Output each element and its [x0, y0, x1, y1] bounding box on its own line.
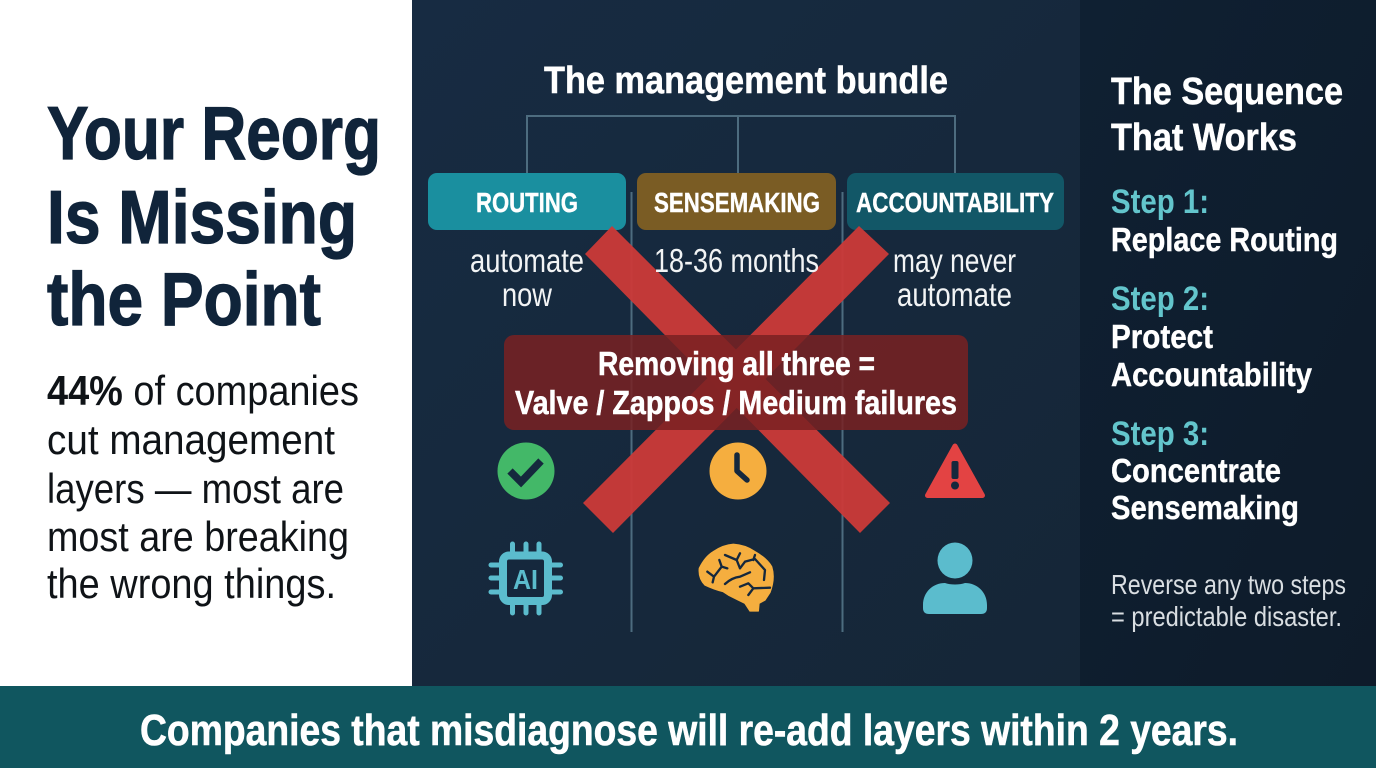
step 3 [1111, 415, 1299, 526]
step 3: Step 3: [1111, 415, 1209, 453]
heading: the management bundle: The management bundle [544, 60, 948, 102]
callout: removing all three [504, 335, 968, 430]
step 2: Protect [1111, 318, 1213, 355]
box: sensemaking: SENSEMAKING [654, 187, 820, 218]
bracket connector [527, 116, 955, 173]
statistic text: the wrong things. [47, 560, 336, 607]
text: automate now [470, 242, 584, 313]
panel: title and statistic [0, 0, 412, 686]
heading: sequence: That Works [1111, 117, 1297, 159]
heading: sequence [1111, 71, 1343, 159]
text: automate now: automate [470, 242, 584, 279]
icon: AI chip [491, 544, 560, 613]
box: sensemaking [637, 173, 836, 230]
statistic text: most are breaking [47, 513, 349, 560]
text: may never automate: automate [897, 276, 1012, 313]
statistic text: layers — most are [47, 465, 344, 512]
text: automate now: now [502, 276, 552, 313]
icon: warning triangle [928, 446, 982, 496]
step 1 [1111, 183, 1338, 258]
title: Your Reorg [47, 91, 381, 175]
note: reverse any two steps: = predictable disaster. [1111, 601, 1342, 632]
column dividers [632, 192, 842, 632]
box: accountability: ACCOUNTABILITY [856, 187, 1054, 218]
box: routing [428, 173, 626, 230]
step 1: Replace Routing [1111, 221, 1338, 258]
statistic text: 44% of companies [47, 367, 359, 414]
note: reverse any two steps [1111, 569, 1346, 632]
icon: clock [710, 442, 766, 500]
icon: green check [498, 442, 554, 500]
step 3: Sensemaking [1111, 489, 1299, 526]
step 2: Step 2: [1111, 280, 1209, 318]
icon: AI chip: AI [513, 564, 538, 595]
text: 18-36 months: 18-36 months [654, 242, 819, 279]
title [47, 91, 381, 341]
title: Is Missing [47, 175, 357, 259]
step 1: Step 1: [1111, 183, 1209, 221]
heading: sequence: The Sequence [1111, 71, 1343, 113]
bottom banner [0, 686, 1376, 768]
step 2: Accountability [1111, 356, 1313, 393]
step 2 [1111, 280, 1313, 393]
callout: removing all three: Removing all three = [598, 345, 875, 382]
panel: management bundle [412, 0, 1080, 686]
title: the Point [47, 257, 321, 341]
icon: person [923, 542, 987, 614]
box: routing: ROUTING [476, 187, 578, 218]
step 3: Concentrate [1111, 452, 1281, 489]
red cross [583, 226, 890, 533]
panel: the sequence that works [1080, 0, 1376, 686]
callout: removing all three: Valve / Zappos / Medium failures [515, 384, 957, 421]
text: may never automate [893, 242, 1016, 313]
text: may never automate: may never [893, 242, 1016, 279]
box: accountability [847, 173, 1064, 230]
icon: brain [699, 544, 773, 611]
statistic text: cut management [47, 416, 335, 463]
statistic text [47, 367, 359, 607]
